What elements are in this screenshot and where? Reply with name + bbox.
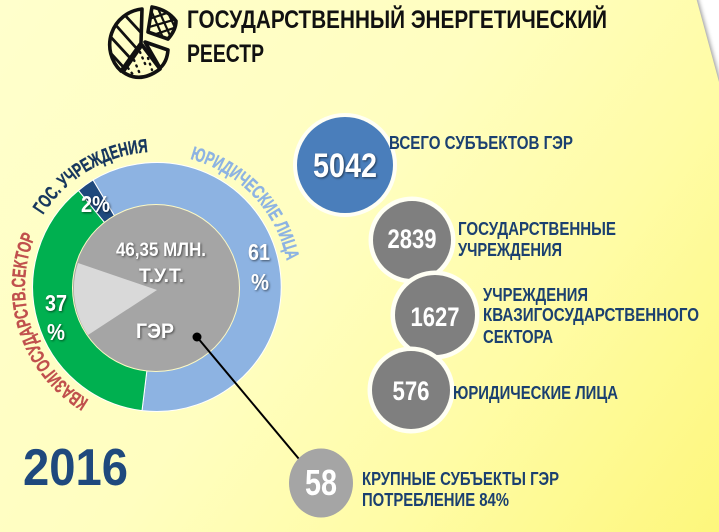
percent label 37 [45, 290, 67, 345]
circle: 58 [289, 448, 353, 518]
percent label 37: % [47, 319, 65, 345]
label: large consumers [362, 469, 559, 510]
percent label 61: 61 [248, 239, 270, 265]
circle: 576 [368, 346, 454, 434]
percent label 2: 2% [81, 191, 110, 217]
title: РЕЕСТР [187, 40, 264, 68]
label: large consumers: КРУПНЫЕ СУБЪЕКТЫ ГЭР [362, 469, 559, 489]
circle: 2839: 2839 [388, 224, 436, 254]
circle: 1627 [390, 270, 480, 360]
inner pie [72, 204, 240, 372]
label: legal entities: ЮРИДИЧЕСКИЕ ЛИЦА [453, 383, 618, 403]
label: quasi-state institutions: УЧРЕЖДЕНИЯ [483, 285, 588, 305]
donut chart [33, 162, 281, 411]
circle: total 5042: 5042 [313, 147, 377, 185]
pie value label: Т.У.Т. [139, 266, 184, 287]
percent label 61: % [251, 269, 269, 295]
circle: total 5042 [293, 113, 397, 217]
curved label: state institutions: ГОС. УЧРЕЖДЕНИЯ [32, 138, 148, 214]
pie name label: ГЭР [136, 320, 174, 343]
inner pie light slice [74, 263, 157, 335]
curved label: legal entities: ЮРИДИЧЕСКИЕ ЛИЦА [190, 146, 299, 261]
label: total: ВСЕГО СУБЪЕКТОВ ГЭР [389, 133, 573, 153]
label: state institutions: УЧРЕЖДЕНИЯ [458, 240, 562, 260]
pie value label [116, 240, 206, 287]
segment: legal entities 61% [93, 162, 281, 411]
label: quasi-state institutions: СЕКТОРА [483, 327, 553, 347]
title [187, 4, 607, 68]
pie value label: 46,35 МЛН. [116, 240, 206, 261]
title: ГОСУДАРСТВЕННЫЙ ЭНЕРГЕТИЧЕСКИЙ [187, 4, 607, 34]
label: state institutions [458, 219, 616, 260]
label: state institutions: ГОСУДАРСТВЕННЫЕ [458, 219, 616, 239]
circle: 1627: 1627 [410, 302, 460, 332]
percent label 37: 37 [45, 290, 67, 316]
label: large consumers: ПОТРЕБЛЕНИЕ 84% [362, 490, 509, 510]
circle: 2839 [368, 196, 456, 284]
segment: state institutions 2% [78, 180, 157, 287]
circle: 58: 58 [305, 462, 337, 503]
label: quasi-state institutions [483, 285, 699, 347]
year: 2016 [23, 439, 128, 497]
icon: hand-drawn pie chart [106, 4, 180, 77]
inner pie main slice [73, 205, 239, 371]
segment: quasi-state sector 37% [33, 190, 157, 411]
percent label 61 [248, 239, 270, 295]
leader line from pie to 58 [192, 332, 299, 459]
circle: 576: 576 [392, 376, 430, 406]
curved label: quasi-state sector: КВАЗИГОСУДАРСТВ.СЕКТОР [12, 232, 88, 411]
